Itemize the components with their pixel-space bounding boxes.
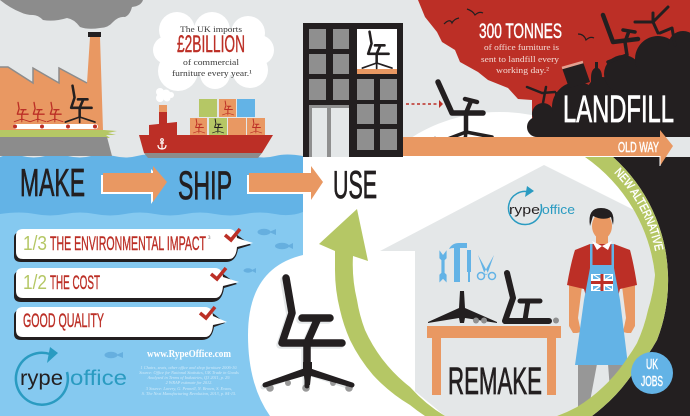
bottle [591,62,602,86]
house shape [380,165,655,416]
hull [139,135,273,153]
old way arrow [403,130,673,166]
panel: cost bubble: THE COST [50,273,100,294]
arms [569,284,635,333]
chair in heap left [527,87,555,103]
hammer [449,243,467,282]
footnotes: 2 WRAP estimate for 2012. [166,380,212,385]
neck and face [592,213,612,246]
panel: environmental impact bubble: 3 [208,236,211,241]
heading: use: USE [333,164,377,207]
panel: red landfill sky [418,0,690,135]
text block: 300 tonnes: of office furniture is [484,42,559,52]
icon: anchor [158,139,166,149]
arrow: make to ship [101,166,167,204]
panel: office building [303,23,403,157]
apron [575,244,628,365]
icon: red chair [14,102,30,122]
text block: 300 tonnes: 300 TONNES [479,20,562,43]
icon: tools [440,243,496,282]
icon: falling chair [433,82,492,141]
icon: black chair [65,86,95,122]
grey cliff [0,137,112,156]
ring label: new alternative: NEW ALTERNATIVE [614,167,664,252]
heading: remake: REMAKE [448,361,542,403]
figure: man in apron [567,208,637,412]
icon: red chair [47,102,63,122]
panel: quality bubble [14,307,227,340]
grid of windows [309,29,397,150]
logo: rype office in house [508,186,575,224]
grass strip [0,130,117,138]
union flag on apron [591,274,613,291]
old way arrow: OLD WAY [618,139,659,156]
red shirt [567,244,637,300]
conveyor belt [13,124,98,129]
arrow: ship to use [247,166,323,203]
red dotted arrow [406,100,443,108]
hull shadow [144,153,262,158]
wrench [440,252,446,281]
ship smoke [156,88,174,102]
footnotes: 1 Chairs, seats, other office and shop furniture 2006-10. [141,365,237,371]
footnotes: Analysed in Terms of Industries, Q3 2011, p. 29. [147,375,230,381]
callout: imports cloud: £2BILLION [177,31,245,58]
top grey background [0,0,690,158]
callout: imports cloud: The UK imports [180,24,242,34]
panel: container ship [139,88,273,158]
table [427,326,561,395]
icon: chair seat on table [505,273,559,324]
icon: big office chair [263,278,353,392]
factory building [0,37,103,130]
funnel [159,105,167,126]
text block: 300 tonnes: sent to landfill every [481,54,560,64]
logo: rype office bottom left: rype [20,367,63,390]
green circular arrow [319,157,668,416]
chair in heap [603,15,638,62]
heading: ship: SHIP [178,164,232,208]
light blue water panel [0,210,303,416]
callout: imports cloud [153,12,274,91]
screwdriver [467,250,471,282]
legs [578,364,623,412]
hair [589,208,614,226]
text block: 300 tonnes: working day.² [496,65,549,75]
badge: UK jobs: JOBS [641,373,663,390]
logo: rype office bottom left [16,347,127,405]
dark blue water band [0,154,303,216]
panel: landfill heap [527,7,690,137]
barrel [562,62,590,88]
white circle inside the ring [335,112,668,416]
logo: rype office in house: rype [509,202,540,217]
panel: environmental impact bubble [14,229,253,262]
white lower-right background [303,157,690,416]
black background outside the ring [500,157,690,416]
collar [592,241,612,250]
panel: factory [0,0,143,156]
white blob around big chair [248,255,303,416]
callout: imports cloud: furniture every year.¹ [172,68,252,78]
scissors [478,255,496,280]
heading: make: MAKE [20,162,85,205]
footnotes [139,365,239,397]
icon: red chair [30,102,46,122]
panel: cost bubble [14,268,239,302]
cabin [149,122,177,135]
text block: 300 tonnes [479,20,562,75]
logo: rype office bottom left: office [70,367,127,390]
doors [309,105,349,157]
footnotes: 3 Source: Lavery, G. Pennell, N. Brown, S. Evans, [146,386,232,392]
badge: UK jobs [631,352,673,394]
lit window with chair [357,29,397,74]
panel: environmental impact bubble: THE ENVIRONMENTAL IMPACT [50,234,206,255]
logo: rype office in house: office [542,202,575,217]
smoke [0,0,143,29]
chair in heap top right [635,7,675,45]
panel: cost bubble: 1/2 [23,272,47,294]
badge: UK jobs: UK [646,356,658,373]
icon: fish [104,229,293,358]
footnotes: S. The Next Manufacturing Revolution, 2013, p. 84-15. [142,391,236,397]
callout: imports cloud: of commercial [183,57,240,67]
icon: birds [444,9,594,40]
panel: environmental impact bubble: 1/3 [23,233,47,255]
panel: quality bubble: GOOD QUALITY [23,311,104,332]
containers [190,99,265,135]
footnotes: Source: Office for National Statistics, UK Trade in Goods [139,370,239,376]
icon: chair base on table [428,291,497,324]
website url: www.RypeOffice.com [147,349,232,360]
chimney cap [88,32,101,37]
